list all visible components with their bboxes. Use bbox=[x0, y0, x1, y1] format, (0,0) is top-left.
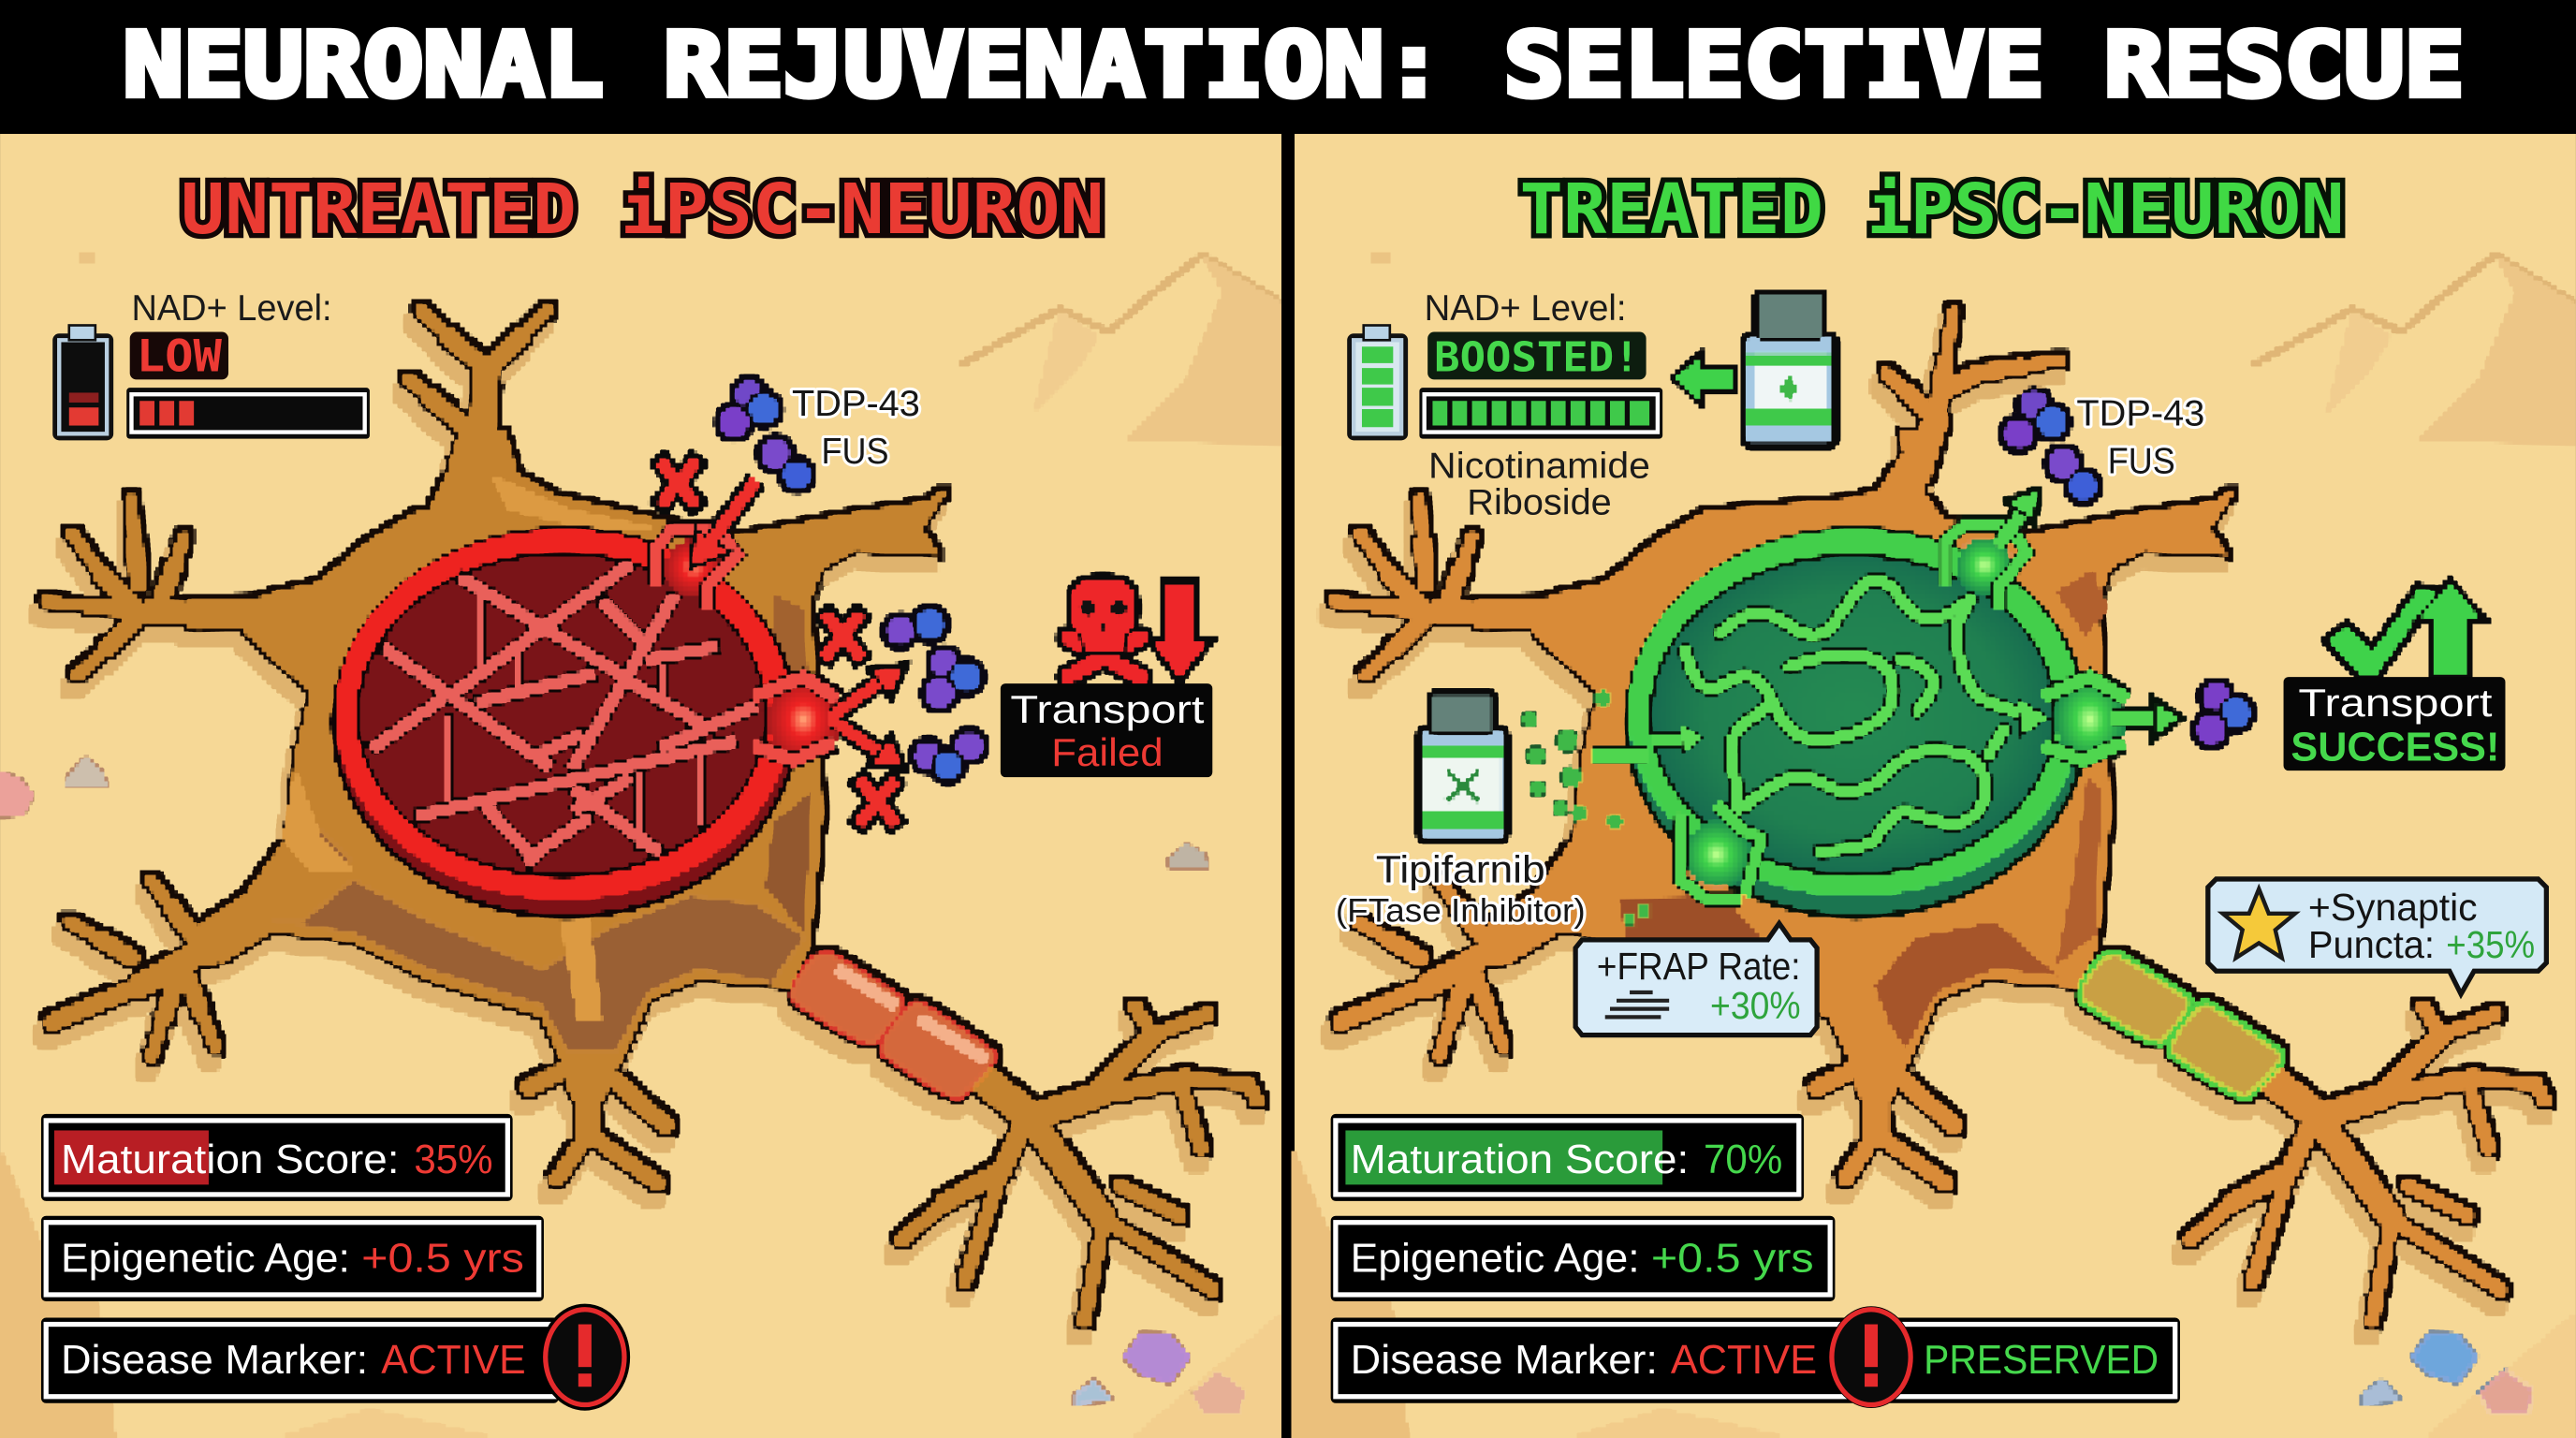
RNA-binding protein clusters bbox=[718, 379, 985, 782]
panel: untreated neuron bbox=[0, 134, 1281, 1438]
NAD+ gauge bbox=[54, 288, 370, 439]
blocked arrows bbox=[690, 481, 905, 769]
icon: check and up arrow bbox=[2326, 581, 2484, 679]
title: NEURONAL REJUVENATION: SELECTIVE RESCUE bbox=[124, 14, 2465, 117]
nucleus: restored lamin threads bbox=[1627, 529, 2086, 917]
RNA-binding protein clusters bbox=[2002, 389, 2252, 746]
stat: disease marker: ACTIVE bbox=[381, 1337, 526, 1383]
NAD+ gauge: BOOSTED! bbox=[1434, 334, 1640, 382]
nuclear pore: right, open bbox=[2043, 677, 2126, 762]
header bar bbox=[0, 0, 2576, 134]
callout: synaptic puncta: Puncta: bbox=[2308, 923, 2435, 966]
stat: disease marker bbox=[1331, 1306, 2180, 1408]
tipifarnib label bbox=[1336, 847, 1586, 930]
transport success label: SUCCESS! bbox=[2291, 725, 2499, 770]
supplement label bbox=[1428, 447, 1650, 522]
stat: maturation score: Maturation Score: bbox=[61, 1137, 400, 1182]
NAD+ gauge: LOW bbox=[137, 331, 222, 383]
panel heading: treated: TREATED iPSC-NEURON bbox=[1519, 170, 2344, 250]
stat: epigenetic age: +0.5 yrs bbox=[1651, 1235, 1814, 1281]
callout: FRAP rate bbox=[1575, 923, 1817, 1035]
icon: alert bbox=[1828, 1306, 1914, 1408]
neuron shading bbox=[271, 477, 986, 1060]
icon: star bbox=[2223, 888, 2295, 958]
protein labels bbox=[2076, 394, 2204, 481]
neuron body and dendrites bbox=[46, 311, 1257, 1321]
supplement label: Riboside bbox=[1467, 482, 1612, 522]
transport success label bbox=[2284, 677, 2505, 770]
callout: synaptic puncta: +Synaptic bbox=[2308, 886, 2478, 929]
arrow: supplement to battery bbox=[1674, 355, 1734, 403]
icon: alert bbox=[542, 1306, 627, 1408]
stat: disease marker: ACTIVE bbox=[1671, 1337, 1817, 1383]
panel: treated neuron bbox=[1293, 134, 2576, 1438]
icon: nicotinamide riboside bottle bbox=[1745, 292, 1835, 446]
nucleus: tangled lamin filaments bbox=[333, 529, 797, 917]
nuclear pore: lower left, open bbox=[1679, 805, 1761, 901]
stat: disease marker: PRESERVED bbox=[1924, 1337, 2159, 1383]
pebbles and shells bbox=[0, 757, 1245, 1413]
pixel art layer: treated bbox=[1293, 255, 2574, 1438]
callout: synaptic puncta: +35% bbox=[2446, 923, 2535, 966]
transport success label: Transport bbox=[2298, 681, 2493, 725]
callout: FRAP rate: +30% bbox=[1710, 984, 1801, 1027]
stat: epigenetic age: Epigenetic Age: bbox=[1351, 1235, 1640, 1281]
stat: maturation score: 70% bbox=[1704, 1137, 1782, 1182]
stat: epigenetic age bbox=[41, 1216, 544, 1301]
down arrow bbox=[1150, 581, 1211, 681]
panel heading: untreated: UNTREATED iPSC-NEURON bbox=[181, 170, 1104, 250]
icon: speed lines bbox=[1605, 992, 1669, 1017]
neuron body and dendrites bbox=[1334, 312, 2545, 1321]
NAD+ gauge bbox=[1349, 288, 1662, 439]
transport failed label bbox=[1001, 683, 1212, 777]
callout: FRAP rate: +FRAP Rate: bbox=[1597, 945, 1801, 988]
stat: disease marker: Disease Marker: bbox=[61, 1337, 368, 1383]
stat: maturation score bbox=[1331, 1114, 1804, 1201]
callout: synaptic puncta bbox=[2208, 879, 2546, 994]
transport failed label: Transport bbox=[1010, 687, 1205, 731]
NAD+ gauge: NAD+ Level: bbox=[131, 288, 332, 329]
pixel art layer: untreated bbox=[0, 255, 1281, 1438]
skull and crossbones icon bbox=[1068, 577, 1140, 677]
nuclear pore: right, blocked bbox=[754, 677, 840, 762]
protein labels: TDP-43 bbox=[2076, 394, 2204, 434]
supplement label: Nicotinamide bbox=[1428, 447, 1650, 487]
nuclear pore: top, blocked bbox=[655, 527, 738, 609]
protein labels: FUS bbox=[822, 432, 889, 472]
drug particles bbox=[1523, 690, 1649, 925]
NAD+ gauge: NAD+ Level: bbox=[1425, 288, 1627, 329]
tipifarnib label: Tipifarnib bbox=[1376, 847, 1545, 890]
transport arrows: green bbox=[1592, 490, 2180, 756]
transport failed label: Failed bbox=[1051, 730, 1164, 774]
stat: epigenetic age: +0.5 yrs bbox=[361, 1235, 524, 1281]
shells bbox=[2363, 1332, 2533, 1413]
protein labels bbox=[792, 384, 920, 472]
centre divider bbox=[1281, 133, 1295, 1438]
nuclear pore: top, open bbox=[1945, 526, 2027, 609]
icon: tipifarnib bottle bbox=[1419, 694, 1506, 840]
red X marks bbox=[664, 465, 892, 820]
battery icon: low bbox=[54, 325, 111, 439]
stat: epigenetic age: Epigenetic Age: bbox=[61, 1235, 350, 1281]
stat: maturation score bbox=[41, 1114, 513, 1201]
neuron shading bbox=[1617, 566, 2106, 1051]
tipifarnib label: (FTase Inhibitor) bbox=[1336, 893, 1586, 930]
stat: disease marker: Disease Marker: bbox=[1351, 1337, 1658, 1383]
stat: maturation score: 35% bbox=[414, 1137, 493, 1182]
protein labels: TDP-43 bbox=[792, 384, 920, 424]
battery icon: full bbox=[1349, 325, 1406, 439]
stat: disease marker bbox=[41, 1306, 627, 1408]
stat: maturation score: Maturation Score: bbox=[1351, 1137, 1689, 1182]
protein labels: FUS bbox=[2108, 441, 2175, 481]
stat: epigenetic age bbox=[1331, 1216, 1835, 1301]
